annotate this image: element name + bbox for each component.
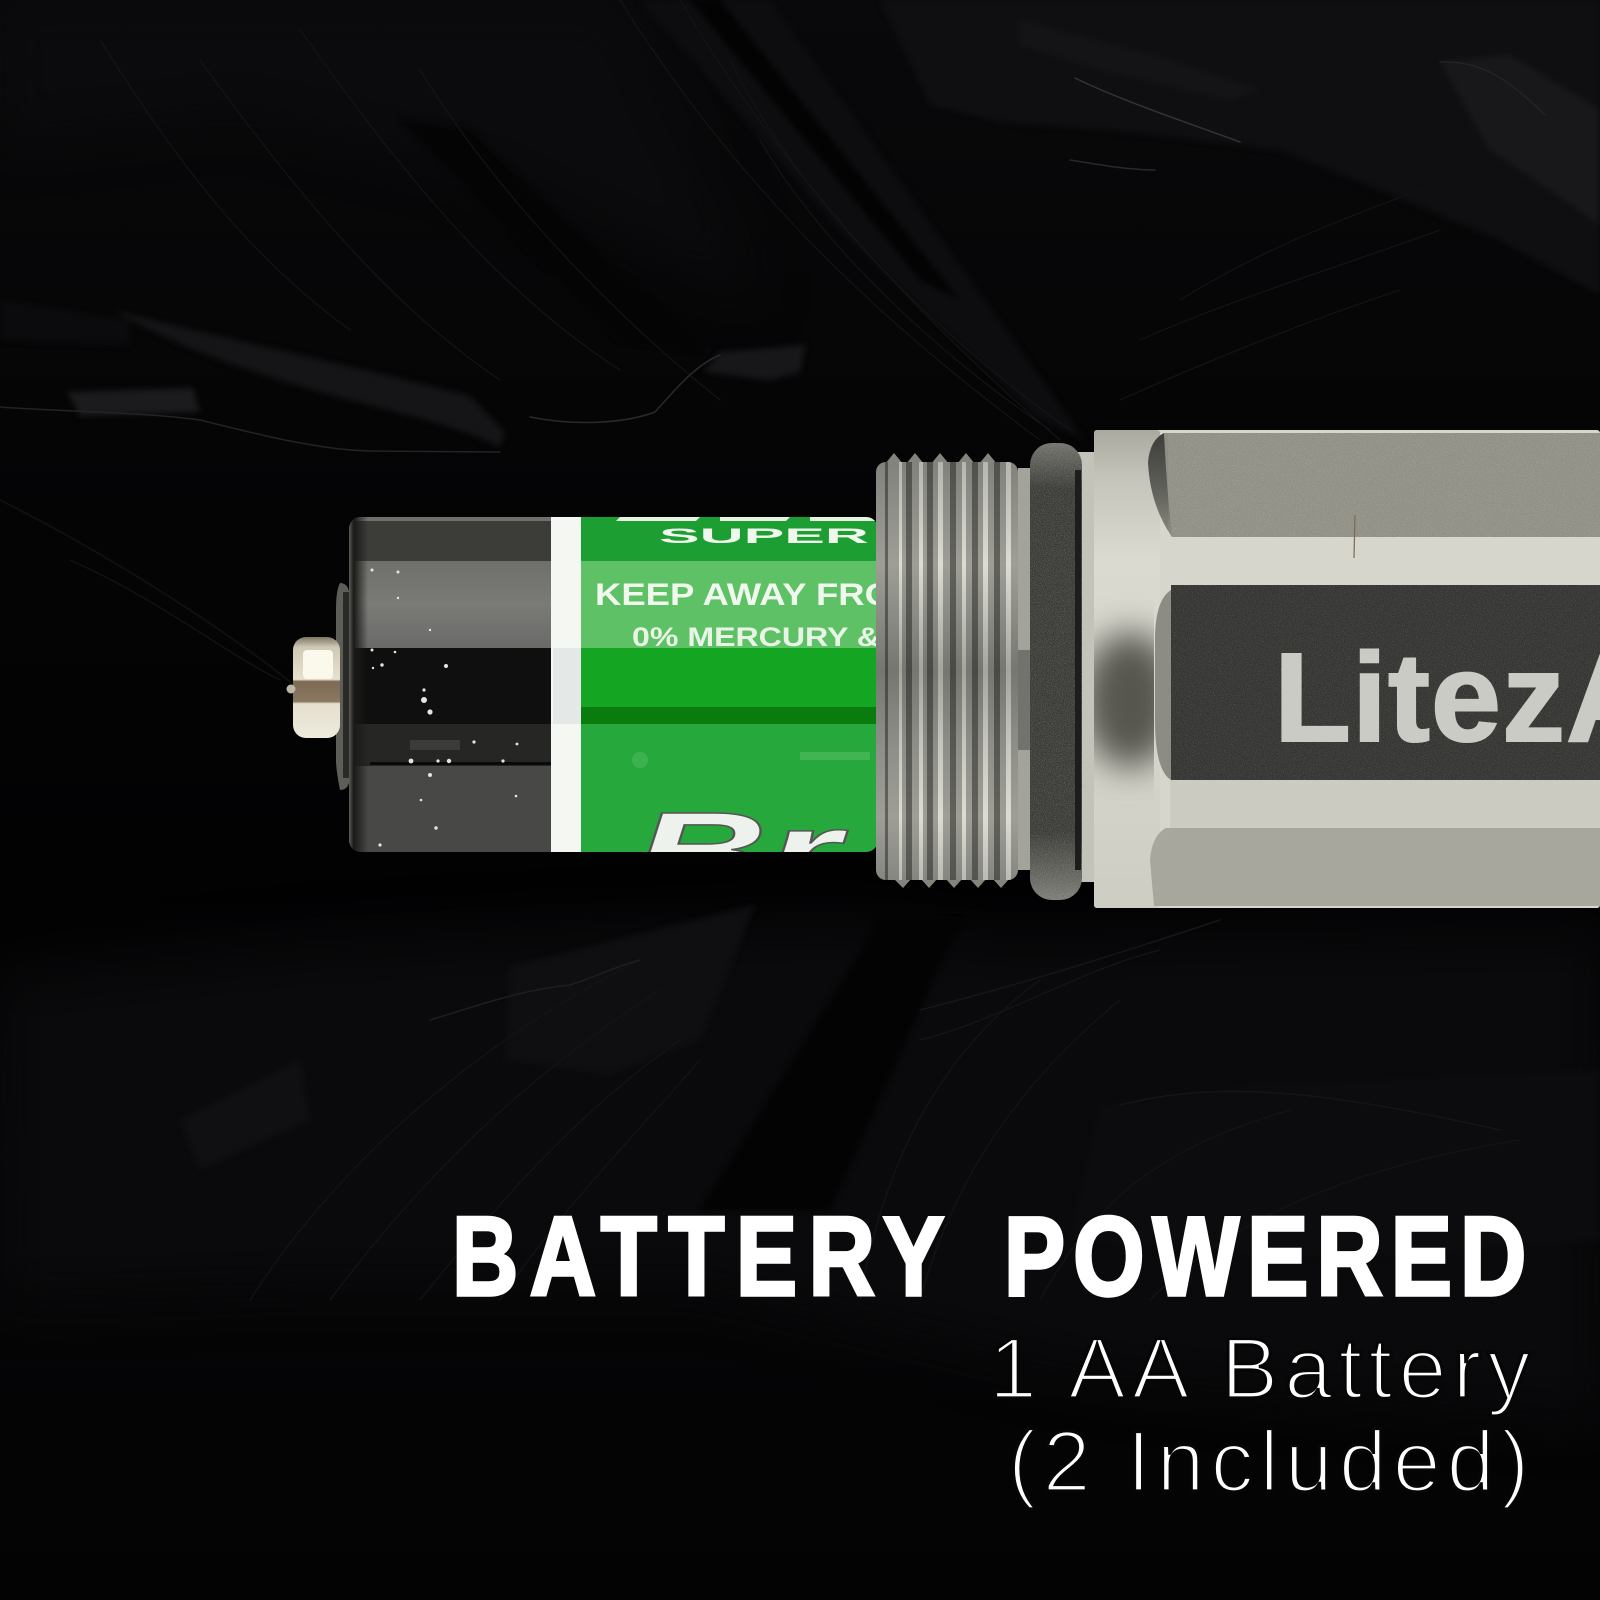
flashlight and battery photo illustration (286, 430, 1600, 914)
fine brush strokes (100, 0, 1520, 1300)
green label (581, 517, 876, 852)
battery (286, 517, 876, 852)
grey casing bands (349, 517, 553, 852)
label text: keep away: KEEP AWAY FRO (595, 576, 893, 612)
battery casing (349, 517, 876, 852)
threaded end cap (876, 453, 1031, 888)
label logo lettering: Br (634, 790, 848, 914)
body (1094, 430, 1600, 908)
sparkles on casing (370, 568, 518, 847)
logo flat (1155, 585, 1600, 780)
collar (1076, 452, 1096, 882)
white label band (551, 517, 581, 852)
crisper paint shapes (0, 0, 1600, 1260)
subheading line 2: (2 Included) (1008, 1414, 1535, 1510)
top flat (1148, 433, 1600, 558)
thread teeth (885, 453, 1010, 888)
rubber o-ring (1030, 443, 1082, 900)
battery positive tip (286, 583, 350, 790)
highlight strip lower (1170, 780, 1600, 828)
bottom flat (1150, 828, 1600, 906)
shoulder shading (1094, 430, 1160, 908)
collar and body (1076, 430, 1600, 908)
label text: mercury: 0% MERCURY & (632, 622, 880, 652)
label remnant at top edge (616, 517, 878, 521)
shoulder dark reflection (1094, 610, 1154, 790)
label text: SUPER: SUPER (659, 524, 869, 548)
subheading line 1: 1 AA Battery (989, 1321, 1537, 1417)
heading: BATTERY (452, 1193, 956, 1319)
neck (1018, 468, 1031, 870)
scratch (1354, 515, 1355, 558)
heading: POWERED (1004, 1193, 1534, 1319)
